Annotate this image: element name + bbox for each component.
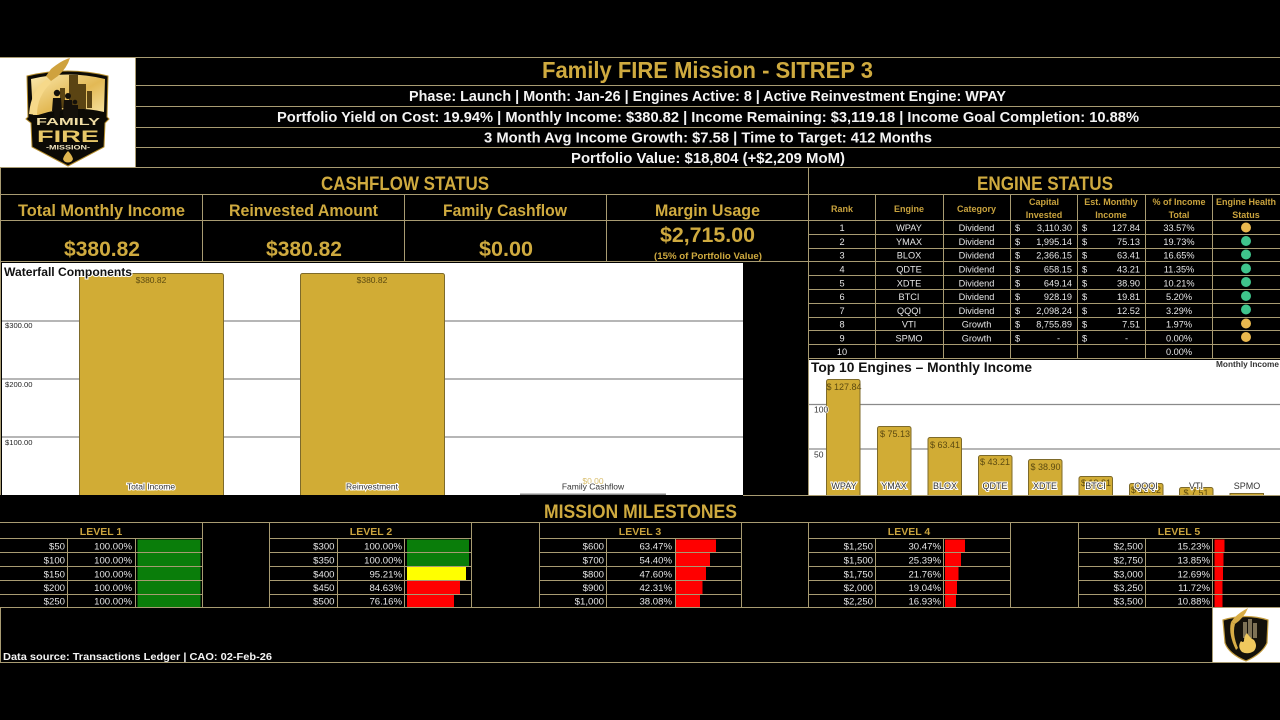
row: QDTE: Dividend [959,264,994,274]
progress bars [676,540,716,607]
kpi: total monthly income [18,201,185,261]
row: SPMO: $ [1082,334,1087,344]
values: 100.00% [94,583,132,594]
category labels: QDTE [982,481,1008,491]
table header: Est. Monthly [1084,197,1138,207]
values: $250 [44,596,65,608]
row: XDTE: $ [1082,278,1087,288]
row: YMAX: 1,995.14 [1036,237,1072,247]
progress bars [138,540,200,607]
row: QDTE [839,264,1251,274]
row: QQQI: QQQI [897,306,921,316]
row: BLOX: Dividend [959,250,994,260]
table header: Capital [1029,197,1059,207]
row: XDTE: 38.90 [1117,278,1140,288]
panel: logo [0,58,135,167]
values: $700 [583,556,604,566]
category labels: Family Cashflow [562,482,625,492]
value labels: $ 12.52 [1131,485,1161,495]
row: QDTE: 658.15 [1044,264,1072,274]
category labels: BTCI [1085,481,1106,491]
values: $500 [313,596,334,608]
category labels [831,481,1260,491]
chart title: Waterfall Components [4,267,132,279]
row: QDTE: 11.35% [1164,264,1194,274]
table header: Total [1169,210,1189,220]
table header: Invested [1026,210,1062,220]
row: VTI: 1.97% [1166,320,1192,330]
kpi: total monthly income: Total Monthly Income [18,201,185,220]
kpi: family cashflow [443,201,568,261]
category labels: WPAY [831,481,857,491]
row: QQQI: 2,098.24 [1036,306,1072,316]
category labels: QQQI [1134,481,1158,491]
values: 13.85% [1177,556,1210,566]
icon: shield [26,71,109,166]
panel: milestones grid lines [0,522,1280,608]
value labels: $ 38.90 [1030,462,1061,472]
values: $2,000 [844,583,873,594]
heading: mission milestones: MISSION MILESTONES [544,502,737,523]
kpi: family cashflow: $0.00 [479,238,533,261]
values: 100.00% [364,556,402,566]
row: QDTE: 4 [839,264,845,274]
logo wordmark fire: FIRE [37,127,99,146]
row: QQQI: 3.29% [1166,306,1192,316]
row: QDTE: 43.21 [1117,264,1140,274]
row: SPMO: - [1057,334,1060,344]
row: VTI: $ [1082,320,1087,330]
row: VTI: Growth [962,320,991,330]
panel: cashflow status [0,167,808,495]
values: 95.21% [369,570,402,580]
row: YMAX: 75.13 [1117,237,1140,247]
values: $1,250 [844,542,873,552]
values: $200 [44,583,65,594]
row: WPAY: $ [1015,223,1020,233]
table header: Income [1095,210,1127,220]
row: WPAY: 127.84 [1112,223,1140,233]
values: $1,000 [575,596,604,608]
kpi: margin usage [654,201,762,262]
chart: top 10 engines [809,360,1280,495]
panel: engine status table [808,174,1280,359]
row: BLOX: 3 [839,250,845,260]
row: WPAY: $ [1082,223,1087,233]
table header: Engine [894,204,924,214]
table header: Status [1232,210,1260,220]
kpi: reinvested amount: Reinvested Amount [229,201,378,220]
row: XDTE [839,277,1251,288]
status line: yield: Portfolio Yield on Cost: 19.94% | Monthly Income: $380.82 | Income Remaining: $3,119.18 | Income Goal Completion: 10.88% [277,110,1139,126]
row: YMAX: 19.73% [1163,237,1195,247]
value labels: $ 7.51 [1183,488,1209,498]
row: QQQI: 7 [839,306,845,316]
panel: level 5 [1114,526,1224,608]
panel: header grid lines [0,57,1280,496]
icon: rocket [29,58,70,115]
category labels: Reinvestment [346,482,399,492]
row: VTI: 8,755.89 [1036,320,1072,330]
status line: portfolio value: Portfolio Value: $18,804 (+$2,209 MoM) [571,151,845,167]
value labels: $380.82 [357,275,388,285]
heading: engine status: ENGINE STATUS [977,174,1113,195]
values: 100.00% [94,596,132,608]
panel: level 4 [844,526,965,608]
values [313,542,402,608]
table header: Category [957,204,996,214]
progress bars [407,540,469,607]
row: BLOX: $ [1015,250,1020,260]
value labels: $ 19.81 [1081,478,1111,488]
row: QQQI: $ [1082,306,1087,316]
values: 30.47% [908,542,941,552]
legend: Monthly Income [1216,360,1280,369]
row: VTI [839,318,1251,330]
row: VTI: 7.51 [1122,320,1140,330]
axis labels: $100.00 [5,438,32,447]
axis labels: $200.00 [5,380,32,389]
values: 100.00% [94,542,132,552]
table header: Engine Health [1216,197,1276,207]
row: WPAY: WPAY [896,223,922,233]
values: $900 [583,583,604,594]
panel: level 2 [313,526,469,608]
values: $50 [49,542,65,552]
values: 38.08% [639,596,672,608]
row: BTCI: 5.20% [1166,292,1192,302]
icon: city skyline [60,75,92,109]
bar: reinvestment [300,274,444,504]
row: SPMO: - [1125,334,1128,344]
row: SPMO: SPMO [895,334,923,344]
logo wordmark family: FAMILY [36,117,101,128]
kpi: margin usage: (15% of Portfolio Value) [654,251,762,262]
axis labels [5,321,32,447]
row: WPAY: 3,110.30 [1037,223,1072,233]
icon: shield gold field [31,74,105,115]
values [44,542,132,608]
row: BTCI: 928.19 [1044,292,1072,302]
axis labels: $300.00 [5,321,32,330]
row: YMAX: $ [1015,237,1020,247]
values: 100.00% [94,556,132,566]
category labels: SPMO [1234,481,1260,491]
panel: level 1 [44,526,200,608]
row: YMAX: $ [1082,237,1087,247]
bar: family cashflow [520,494,666,495]
row: SPMO [839,332,1251,344]
values: 15.23% [1177,542,1210,552]
kpi: reinvested amount: $380.82 [266,238,342,261]
row: QQQI: $ [1015,306,1020,316]
row: XDTE: 10.21% [1163,278,1195,288]
values: 12.69% [1177,570,1210,580]
row: QDTE: $ [1082,264,1087,274]
icon: small shield logo [1212,608,1280,662]
progress bars [1214,540,1224,607]
values: 10.88% [1177,596,1210,608]
row: QQQI: 12.52 [1117,306,1140,316]
status line: growth: 3 Month Avg Income Growth: $7.58 | Time to Target: 412 Months [484,130,932,146]
values: $450 [313,583,334,594]
values [575,542,672,608]
axis labels: 100 [814,404,828,414]
icon: flame [63,151,73,162]
row: XDTE: XDTE [897,278,921,288]
category labels: Total Income [127,482,175,492]
row: BTCI: BTCI [899,292,919,302]
values: 11.72% [1178,583,1210,594]
values: $3,250 [1114,583,1143,594]
row: rank 10 [837,347,1192,357]
row: BTCI: 6 [839,292,845,302]
row: BTCI: Dividend [959,292,994,302]
table header: % of Income [1152,197,1206,207]
values: 76.16% [369,596,402,608]
value labels: $ 63.41 [930,440,960,450]
values: 100.00% [364,542,402,552]
row: YMAX [839,236,1251,247]
row: BTCI [839,291,1251,302]
row: YMAX: 2 [839,237,845,247]
row: XDTE: 649.14 [1044,278,1072,288]
values: $1,500 [844,556,873,566]
row: WPAY [839,222,1251,233]
row: BLOX: 2,366.15 [1036,250,1072,260]
row: VTI: VTI [902,320,916,330]
values: $600 [583,542,604,552]
row: WPAY: Dividend [959,223,994,233]
value labels: $ 127.84 [826,382,862,392]
values: $1,750 [844,570,873,580]
values: 100.00% [94,570,132,580]
value labels [826,382,1209,498]
chart: waterfall components [2,263,743,504]
row: SPMO: 9 [839,334,845,344]
row: XDTE: 5 [839,278,845,288]
values: $400 [313,570,334,580]
values: $150 [44,570,65,580]
row: SPMO: Growth [962,334,991,344]
axis labels [814,404,828,460]
panel: level 3: LEVEL 3 [619,526,661,538]
heading: cashflow status: CASHFLOW STATUS [321,174,489,195]
table header [831,197,1276,220]
bars [826,379,1264,495]
values: 84.63% [369,583,402,594]
kpi: reinvested amount [229,201,378,261]
panel: level 5: LEVEL 5 [1158,526,1200,538]
values: 19.04% [908,583,941,594]
row: BTCI: $ [1015,292,1020,302]
row: QDTE: QDTE [896,264,922,274]
values [1114,542,1210,608]
row: VTI: 8 [839,320,845,330]
row: BLOX: 16.65% [1163,250,1195,260]
category labels: BLOX [933,481,957,491]
bar: total income [80,274,224,504]
values: $350 [313,556,334,566]
row: WPAY: 33.57% [1163,223,1195,233]
category labels: VTI [1189,481,1203,491]
chart title: Top 10 Engines – Monthly Income [811,360,1032,375]
values: $300 [313,542,334,552]
row: VTI: $ [1015,320,1020,330]
value labels: $380.82 [136,275,167,285]
values: $100 [44,556,65,566]
row: QDTE: $ [1015,264,1020,274]
status line: phase: Phase: Launch | Month: Jan-26 | Engines Active: 8 | Active Reinvestment Engine: WPAY [409,89,1006,105]
row: rank 10: 10 [837,347,847,357]
values: $3,500 [1114,596,1143,608]
row: WPAY: 1 [839,223,845,233]
values: 63.47% [639,542,672,552]
row: XDTE: Dividend [959,278,994,288]
kpi: total monthly income: $380.82 [64,238,140,261]
value labels [136,275,604,486]
row: BLOX: $ [1082,250,1087,260]
row: QQQI: Dividend [959,306,994,316]
row: BLOX: BLOX [897,250,921,260]
values: $800 [583,570,604,580]
values [844,542,941,608]
row: rank 10: 0.00% [1166,347,1192,357]
values: 16.93% [908,596,941,608]
row: XDTE: $ [1015,278,1020,288]
value labels: $ 75.13 [880,429,910,439]
row: YMAX: YMAX [896,237,922,247]
category labels: YMAX [881,481,907,491]
values: 25.39% [908,556,941,566]
axis labels: 50 [814,450,824,460]
values: $2,500 [1114,542,1143,552]
row: QQQI [839,304,1251,316]
title: Family FIRE Mission - SITREP 3 [542,57,873,83]
category labels [127,482,625,492]
row: BLOX: 63.41 [1117,250,1140,260]
kpi: margin usage: Margin Usage [655,201,760,220]
values: 54.40% [639,556,672,566]
footer source note: Data source: Transactions Ledger | CAO: 02-Feb-26 [3,651,272,663]
value labels: $0.00 [582,476,604,486]
category labels: XDTE [1033,481,1057,491]
row: BTCI: 19.81 [1117,292,1140,302]
panel: level 4: LEVEL 4 [888,526,930,538]
row: BLOX [839,250,1251,260]
panel: level 3 [575,526,716,608]
kpi: family cashflow: Family Cashflow [443,201,568,220]
values: 21.76% [908,570,941,580]
icon: family silhouettes [52,90,78,122]
row: YMAX: Dividend [959,237,994,247]
value labels: $ 43.21 [980,457,1010,467]
row: SPMO: 0.00% [1166,334,1192,344]
row: BTCI: $ [1082,292,1087,302]
panel: level 1: LEVEL 1 [80,526,122,538]
kpi: margin usage: $2,715.00 [660,224,755,247]
values: 42.31% [639,583,672,594]
panel: level 2: LEVEL 2 [350,526,392,538]
values: $3,000 [1114,570,1143,580]
values: $2,250 [844,596,873,608]
row: SPMO: $ [1015,334,1020,344]
progress bars [945,540,965,607]
values: 47.60% [639,570,672,580]
logo wordmark mission: -MISSION- [46,144,90,152]
table header: Rank [831,204,854,214]
values: $2,750 [1114,556,1143,566]
